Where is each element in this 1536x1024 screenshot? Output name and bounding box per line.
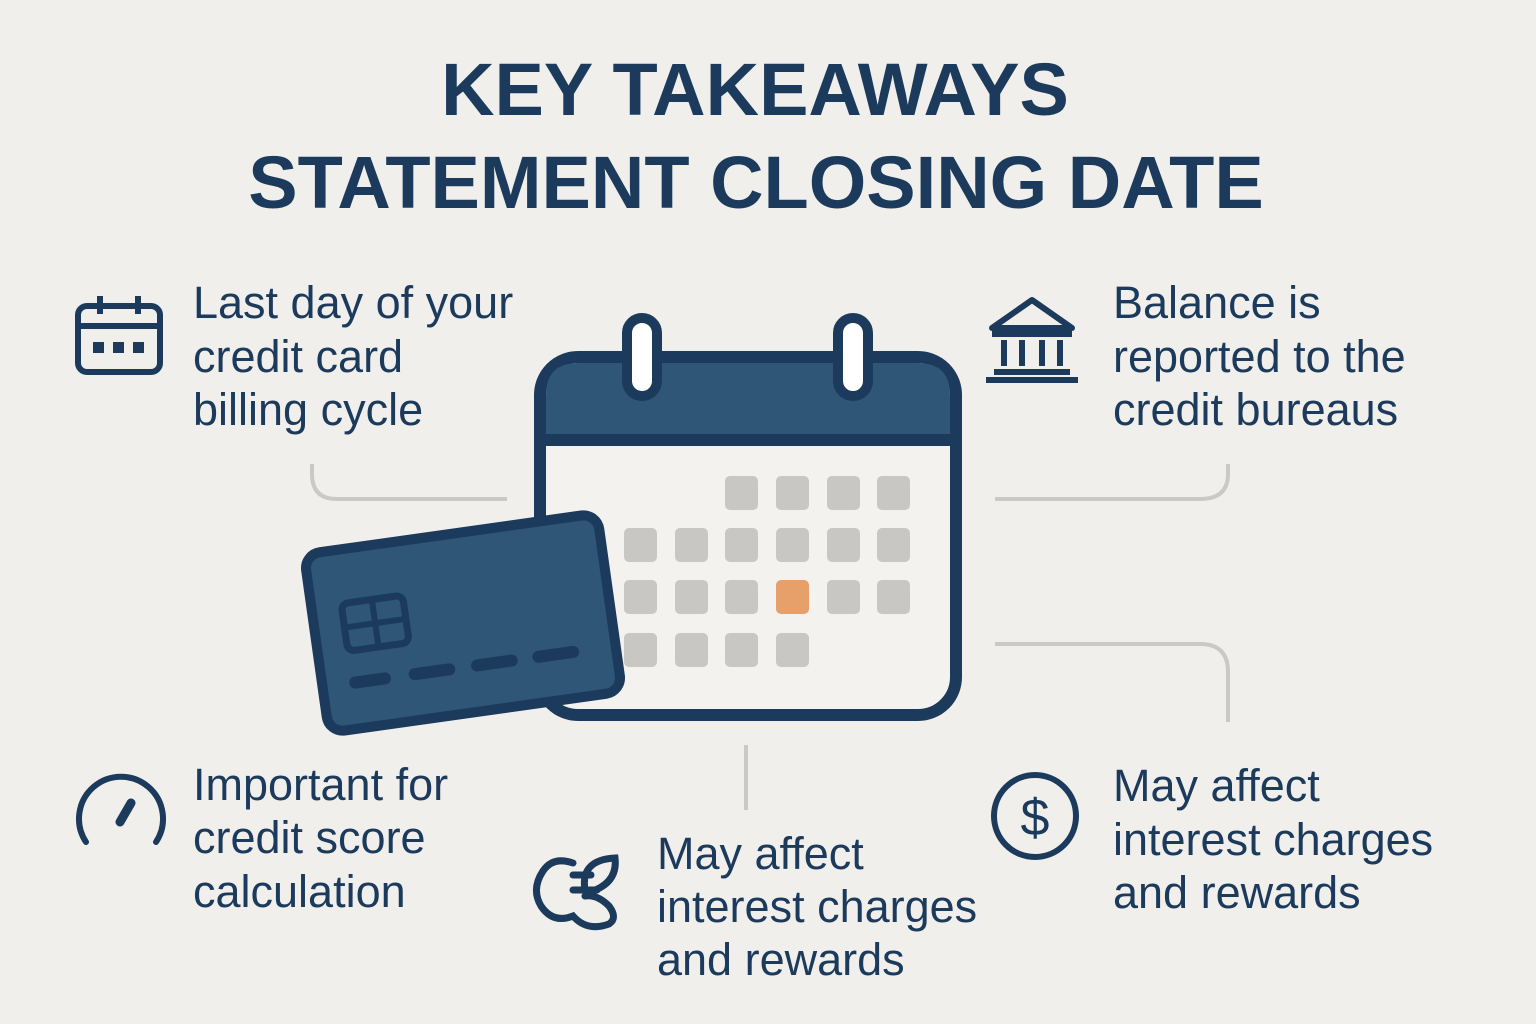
- text: important: credit score: [193, 812, 426, 863]
- text: may affect right: interest charges: [1113, 814, 1433, 865]
- text: may affect right: May affect: [1113, 760, 1320, 811]
- text: may affect middle: [657, 828, 977, 985]
- title: STATEMENT CLOSING DATE: [248, 141, 1264, 224]
- text: important: Important for: [193, 759, 448, 810]
- text: may affect middle: and rewards: [657, 934, 905, 985]
- icon: leaf: [536, 858, 615, 927]
- title: [248, 48, 1264, 224]
- text: may affect right: [1113, 760, 1433, 918]
- text: last day: credit card: [193, 331, 403, 382]
- text: last day: [193, 277, 513, 435]
- text: important: [193, 759, 448, 917]
- text: may affect middle: interest charges: [657, 881, 977, 932]
- connector lines: [312, 464, 1228, 810]
- text: last day: Last day of your: [193, 277, 513, 328]
- calendar illustration: [540, 318, 956, 715]
- icon: bank: [986, 300, 1078, 380]
- credit card: [304, 513, 622, 733]
- text: may affect middle: May affect: [657, 828, 864, 879]
- icon: dollar: [994, 775, 1076, 857]
- text: balance: reported to the: [1113, 331, 1406, 382]
- text: balance: [1113, 277, 1406, 435]
- text: may affect right: and rewards: [1113, 867, 1361, 918]
- icon: dollar: $: [1021, 789, 1050, 847]
- text: balance: Balance is: [1113, 277, 1321, 328]
- icon: gauge: [79, 777, 163, 842]
- text: last day: billing cycle: [193, 384, 423, 435]
- text: important: calculation: [193, 866, 406, 917]
- icon: calendar small: [78, 296, 160, 372]
- title: KEY TAKEAWAYS: [441, 48, 1069, 131]
- text: balance: credit bureaus: [1113, 384, 1398, 435]
